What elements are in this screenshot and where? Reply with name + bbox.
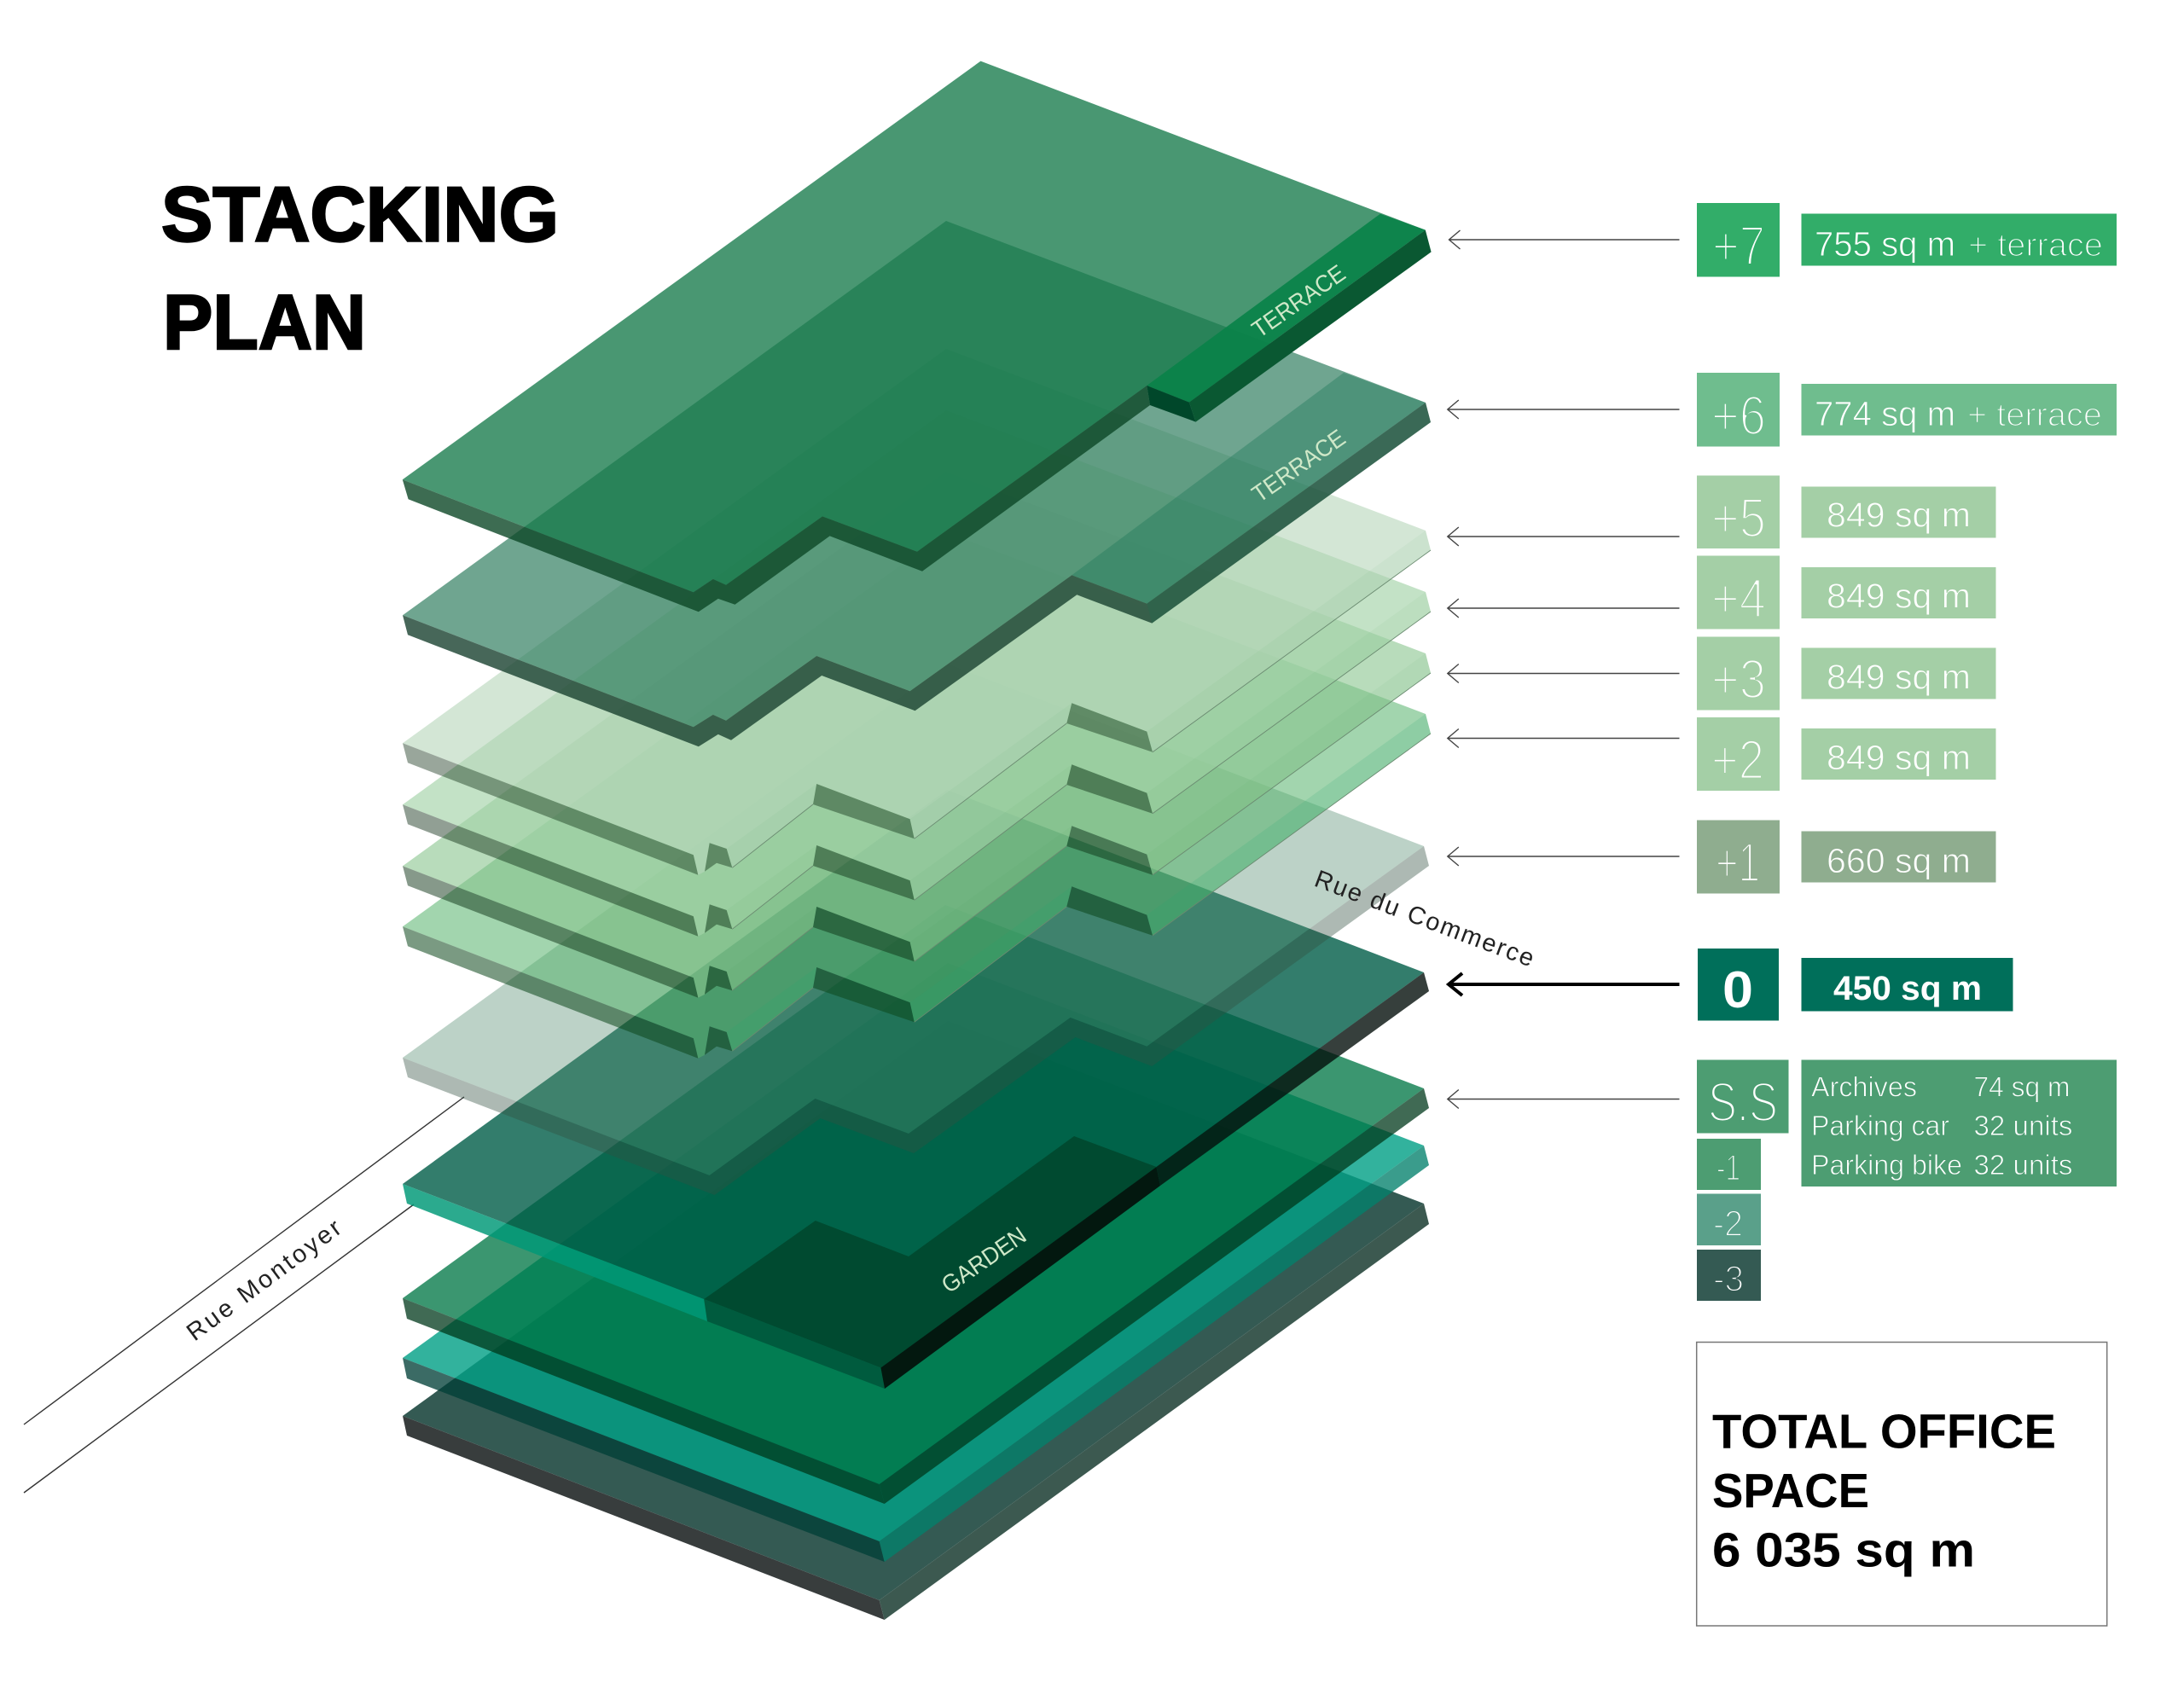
basement info panel: 32 units — [1974, 1149, 2073, 1181]
slab: level -1 — [403, 905, 1429, 1504]
arrow: level +6 — [1448, 400, 1679, 419]
total office space box: TOTAL OFFICE — [1712, 1404, 2056, 1459]
level badge +5: +5 — [1711, 486, 1766, 549]
basement info panel: 74 sq m — [1974, 1071, 2070, 1102]
slab: level +3 — [403, 472, 1431, 998]
area label +6: + terrace — [1967, 397, 2102, 433]
level badge -1: -1 — [1716, 1148, 1740, 1189]
area label +5 — [1802, 486, 1996, 537]
arrow: level 0 — [1449, 973, 1679, 995]
area label +7: + terrace — [1968, 228, 2103, 264]
level badge -2 — [1697, 1194, 1761, 1245]
area label +3 — [1802, 648, 1996, 699]
area label +2: 849 sq m — [1827, 738, 1971, 777]
arrow: level +4 — [1448, 599, 1679, 618]
terrace label level +7: TERRACE — [1247, 259, 1350, 343]
title: STACKING — [161, 172, 559, 258]
total office space box: SPACE — [1712, 1464, 1869, 1518]
garden label: GARDEN — [937, 1221, 1031, 1298]
arrow: level +3 — [1448, 664, 1679, 682]
slab: level -2 — [403, 963, 1429, 1562]
total office space box: 6 035 sq m — [1712, 1523, 1975, 1578]
area label +1: 660 sq m — [1827, 841, 1971, 880]
title: PLAN — [163, 280, 366, 366]
level badge +2 — [1697, 717, 1780, 791]
area label +5: 849 sq m — [1827, 495, 1971, 534]
level badge -1 — [1697, 1139, 1761, 1190]
arrow: level +7 — [1449, 230, 1679, 249]
arrow: level +2 — [1448, 728, 1679, 747]
level badge +7 — [1697, 203, 1780, 276]
level badge S.S — [1697, 1059, 1788, 1133]
arrow: level +1 — [1448, 847, 1679, 866]
area label 0 — [1802, 958, 2013, 1012]
level badge 0: 0 — [1722, 961, 1753, 1018]
total office space box — [1697, 1343, 2107, 1626]
street label: Rue du Commerce: Rue du Commerce — [1311, 866, 1537, 972]
area label +4: 849 sq m — [1827, 577, 1971, 616]
slab: level +6 with terrace — [403, 221, 1431, 746]
level badge -2: -2 — [1713, 1204, 1743, 1245]
level badge +4: +4 — [1711, 566, 1766, 630]
slab: level +7 with terrace — [403, 61, 1432, 612]
basement info panel: Parking bike — [1811, 1149, 1962, 1181]
terrace label level +6: TERRACE — [1247, 424, 1350, 508]
basement info panel: Parking car — [1811, 1110, 1949, 1141]
level badge +6 — [1697, 373, 1780, 447]
garden block — [704, 1136, 1160, 1389]
street label: Rue Montoyer: Rue Montoyer — [182, 1214, 347, 1347]
slab: level +5 — [403, 349, 1431, 875]
slab: level +4 — [403, 410, 1431, 937]
slab: level 0 with garden — [403, 790, 1429, 1389]
arrow: level S.S — [1448, 1090, 1679, 1109]
level badge +3: +3 — [1711, 648, 1766, 710]
level badge +2: +2 — [1711, 728, 1764, 791]
slab: level +2 — [403, 532, 1431, 1059]
level badge +5 — [1697, 476, 1780, 549]
basement info panel: Archives — [1811, 1071, 1917, 1102]
terrace strip level +7 — [1147, 214, 1432, 422]
slab: level +1 — [403, 664, 1429, 1195]
area label +6: 774 sq m — [1815, 394, 1955, 433]
basement info panel — [1802, 1059, 2117, 1187]
area label +7 — [1802, 213, 2117, 266]
slab: level -3 — [403, 1021, 1429, 1620]
area label +1 — [1802, 831, 1996, 882]
level badge +7: +7 — [1712, 215, 1765, 276]
area label +2 — [1802, 728, 1996, 780]
level badge +1: +1 — [1716, 831, 1760, 894]
arrow: level +5 — [1448, 527, 1679, 546]
street lines: Rue Montoyer — [24, 1097, 464, 1493]
area label 0: 450 sq m — [1833, 970, 1982, 1007]
area label +6 — [1802, 384, 2117, 435]
level badge -3: -3 — [1713, 1259, 1744, 1300]
level badge -3 — [1697, 1250, 1761, 1301]
area label +4 — [1802, 567, 1996, 618]
level badge +6: +6 — [1711, 384, 1766, 447]
level badge +1 — [1697, 821, 1780, 894]
title — [161, 172, 559, 366]
area label +7: 755 sq m — [1815, 224, 1955, 264]
basement info panel: 32 units — [1974, 1110, 2073, 1141]
level badge S.S: S.S — [1708, 1071, 1778, 1133]
level badge +3 — [1697, 636, 1780, 710]
area label +3: 849 sq m — [1827, 657, 1971, 696]
level badge 0 — [1698, 949, 1779, 1020]
level badge +4 — [1697, 556, 1780, 630]
